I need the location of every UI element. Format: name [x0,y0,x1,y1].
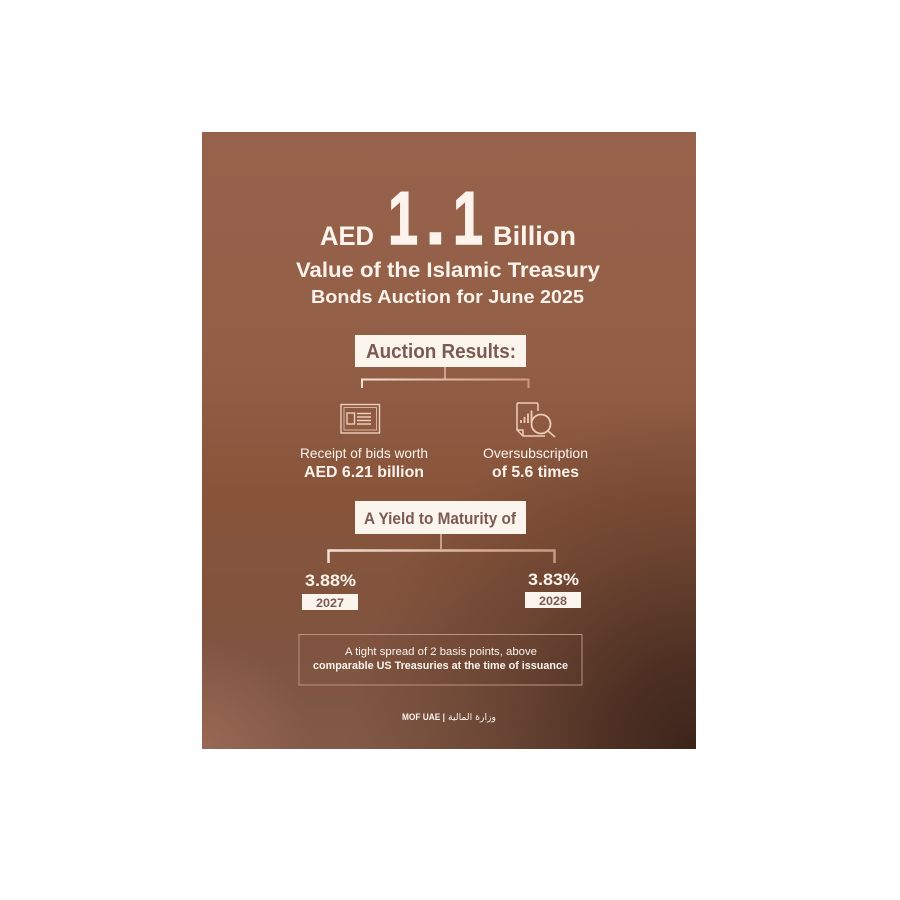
subtitle: Bonds Auction for June 2025 [311,287,584,307]
subtitle [296,259,600,307]
text: oversubscription: Oversubscription [483,445,588,461]
connector: yield [328,534,554,563]
title: AED 1.1 Billion: . [425,176,446,260]
text: oversubscription [483,445,588,481]
connector: auction results [362,367,528,388]
yield 2027 [302,571,358,610]
title: AED 1.1 Billion [320,176,576,260]
callout: tight spread: A tight spread of 2 basis points, above [345,646,537,658]
title: AED 1.1 Billion: Billion [493,221,576,251]
yield 2027: 3.88% [305,571,356,590]
text: receipt of bids: Receipt of bids worth [300,445,428,461]
heading: Auction Results: Auction Results: [366,341,516,363]
text: receipt of bids: AED 6.21 billion [304,464,424,481]
heading: Auction Results [355,335,526,367]
heading: A Yield to Maturity of: A Yield to Maturity of [364,509,516,528]
title: AED 1.1 Billion: 1 [453,176,483,260]
text: oversubscription: of 5.6 times [492,464,579,481]
panel: brown background [202,132,696,749]
text: receipt of bids [300,445,428,481]
title: AED 1.1 Billion: AED [320,221,374,251]
yield 2028 [525,570,581,608]
yield 2028: 3.83% [528,570,579,589]
yield 2027: 2027 [316,598,344,610]
icon: bond certificate [341,404,380,433]
icon: document with magnifier [517,403,555,437]
callout: tight spread: comparable US Treasuries at the time of issuance [313,660,568,672]
yield 2028: 2028 [539,596,568,608]
heading: A Yield to Maturity of [355,501,526,534]
footer: MOF UAE logo text: MOF UAE | [402,712,445,723]
footer: MOF UAE logo text [402,712,496,723]
title: AED 1.1 Billion: 1 [388,176,418,260]
footer: MOF UAE logo text: وزارة المالية [448,712,496,723]
callout: tight spread [299,634,582,685]
subtitle: Value of the Islamic Treasury [296,259,600,282]
